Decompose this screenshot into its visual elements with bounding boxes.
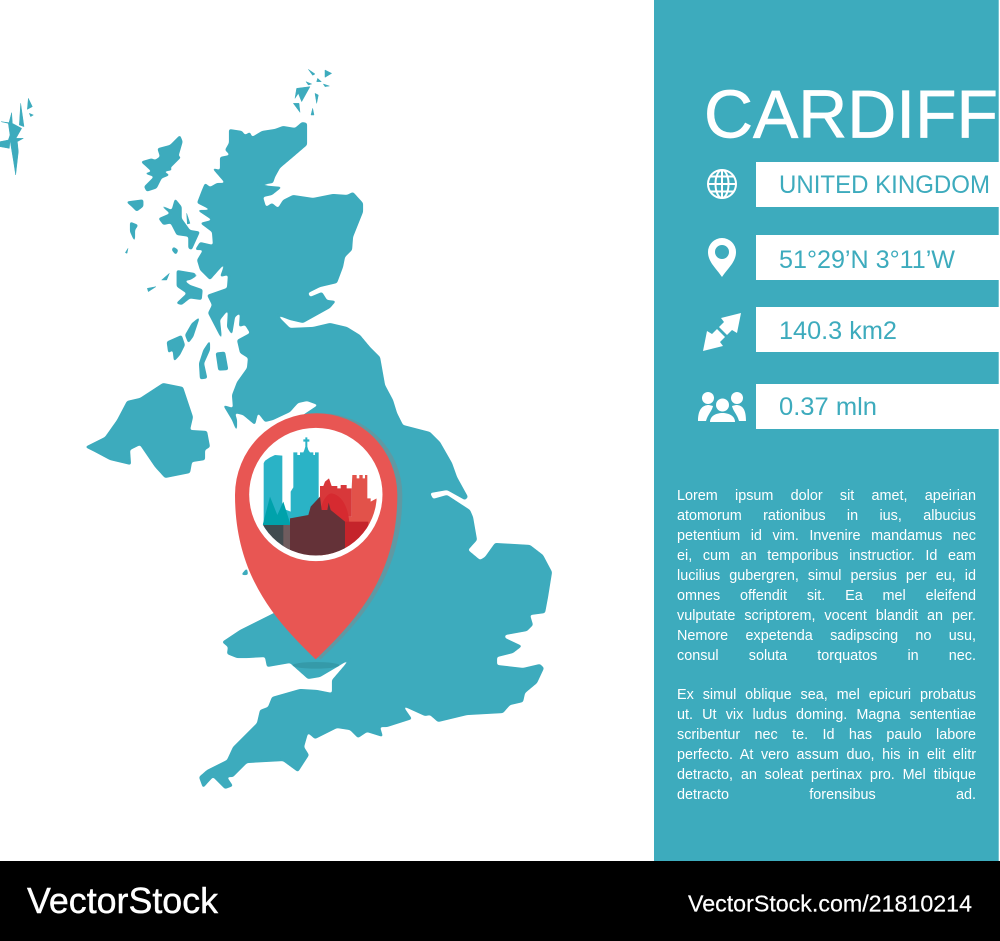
text block: second paragraph: scribentur nec te. Id has paulo labore xyxy=(677,726,976,742)
red castle xyxy=(320,475,377,557)
title: CARDIFF xyxy=(704,76,998,152)
icon: resize arrows xyxy=(703,313,741,351)
map: Great Britain mainland xyxy=(195,122,552,789)
icon: people xyxy=(698,392,746,422)
map pin xyxy=(235,413,402,669)
text block: first paragraph: atomorum rationibus in ius, albucius xyxy=(677,508,976,524)
map: United Kingdom xyxy=(0,69,552,789)
red dome xyxy=(320,493,349,523)
footer logo text: VectorStock xyxy=(27,880,219,921)
footer url text: VectorStock.com/21810214 xyxy=(688,890,972,916)
red castle left wall xyxy=(320,478,352,517)
map: Scottish islands xyxy=(126,135,228,379)
text block: first paragraph xyxy=(677,488,976,664)
text block: first paragraph: omnes offendit sit. Ea mel eleifend xyxy=(677,588,976,604)
pin white circle xyxy=(249,428,382,561)
text block: first paragraph: vulputate scriptorem, vocent blandit an per. xyxy=(677,608,976,624)
side panel xyxy=(654,0,999,861)
pin body xyxy=(235,413,397,659)
text block: second paragraph xyxy=(677,686,976,802)
row: country: UNITED KINGDOM xyxy=(779,171,990,199)
map: main landmasses xyxy=(85,122,552,789)
text block: first paragraph: petentium id vim. Invenire mandamus nec xyxy=(677,528,976,544)
pin tip ground shadow xyxy=(293,662,339,669)
row: area xyxy=(703,307,999,352)
icon: location pin xyxy=(708,238,736,277)
map: Welsh coast fragment xyxy=(241,568,248,575)
city skyline xyxy=(262,437,377,557)
row: coordinates xyxy=(708,235,999,280)
text block: first paragraph: Nemore expetenda sadipscing no usu, xyxy=(677,628,976,644)
map: small islets xyxy=(0,69,332,292)
text block: first paragraph: lucilius gubergren, simul persius per eu, id xyxy=(677,568,976,584)
footer bar xyxy=(0,861,1000,941)
text block: second paragraph: detracto, an soleat pertinax pro. Mel tibique xyxy=(677,766,976,782)
icon: globe xyxy=(708,170,736,198)
pin shadow xyxy=(240,413,402,659)
text block: first paragraph: Lorem ipsum dolor sit amet, apeirian xyxy=(677,488,976,504)
map: Northern Ireland xyxy=(85,383,210,478)
text block: second paragraph: ut. Ut vix ludus doming. Magna sententiae xyxy=(677,706,976,722)
text block: second paragraph: perfecto. At vero assum duo, his in elit elitr xyxy=(677,746,976,762)
row: population xyxy=(698,384,999,429)
dark brown building xyxy=(290,497,345,557)
grey base xyxy=(263,525,292,550)
row: area: 140.3 km2 xyxy=(779,317,897,345)
row: coordinates: 51°29’N 3°11’W xyxy=(779,246,955,274)
row: country xyxy=(708,162,999,207)
row: population: 0.37 mln xyxy=(779,393,877,421)
blue tall building xyxy=(264,437,319,533)
text block: second paragraph: Ex simul oblique sea, mel epicuri probatus xyxy=(677,686,976,702)
teal spires xyxy=(263,497,291,525)
text block: first paragraph: ei, cum an temporibus instructior. Id eam xyxy=(677,548,976,564)
text block: second paragraph: detracto forensibus ad. xyxy=(677,786,976,802)
text block: first paragraph: consul soluta torquatos in nec. xyxy=(677,648,976,664)
brown overlap strip xyxy=(283,525,290,550)
dark red block xyxy=(345,522,368,548)
